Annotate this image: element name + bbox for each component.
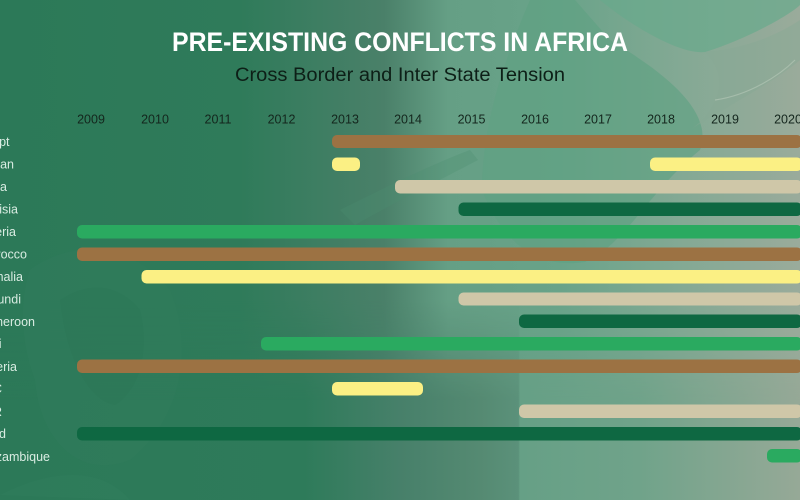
background photo wash <box>272 0 800 500</box>
year axis: 2009 <box>77 112 105 126</box>
subtitle: Cross Border and Inter State Tension <box>235 65 565 86</box>
country labels <box>0 135 50 464</box>
year axis: 2010 <box>141 112 169 126</box>
year axis: 2011 <box>205 112 231 126</box>
year axis: 2017 <box>584 112 612 126</box>
year axis: 2013 <box>331 112 359 126</box>
year axis: 2015 <box>458 112 485 126</box>
year axis <box>77 112 800 126</box>
year axis: 2014 <box>394 112 422 126</box>
year axis: 2016 <box>521 112 549 126</box>
year axis: 2012 <box>268 112 295 126</box>
year axis: 2019 <box>711 112 739 126</box>
title: PRE-EXISTING CONFLICTS IN AFRICA <box>172 27 628 57</box>
timeline bars <box>77 135 800 462</box>
year axis: 2018 <box>647 112 675 126</box>
